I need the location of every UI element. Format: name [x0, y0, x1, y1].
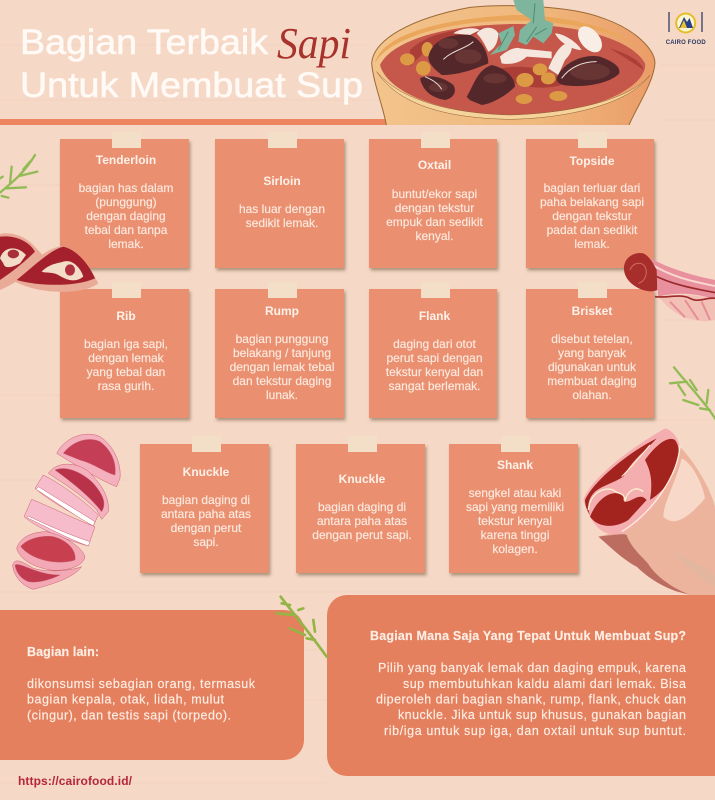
panel: Bagian lain	[0, 610, 304, 760]
title	[20, 23, 363, 105]
illustration: leg of beef right	[583, 428, 715, 595]
note: Flank: sangat berlemak.	[388, 379, 481, 393]
note: Tenderloin: (punggung)	[95, 195, 157, 209]
note: Knuckle 2: dengan perut sapi.	[312, 528, 412, 542]
note: Knuckle 1: Knuckle	[183, 465, 230, 479]
note: Brisket: Brisket	[572, 304, 612, 318]
note: Rump: bagian punggung	[236, 332, 328, 346]
note: Rib: yang tebal dan	[87, 365, 165, 379]
panel: Bagian mana saja: Bagian Mana Saja Yang Tepat Untuk Membuat Sup?	[370, 629, 686, 643]
panel: Bagian mana saja: Pilih yang banyak lemak dan daging empuk, karena	[378, 661, 686, 675]
note: Rib: rasa gurih.	[98, 379, 154, 393]
icon: herb sprig right	[670, 367, 715, 418]
note: Rib: bagian iga sapi,	[84, 337, 168, 351]
logo: Cairo Food	[666, 12, 706, 46]
note: Flank	[369, 282, 497, 418]
meat	[420, 35, 619, 105]
note: Tenderloin: lemak.	[108, 237, 144, 251]
illustration: bowl of soup	[372, 0, 655, 127]
note: Knuckle 2: bagian daging di	[318, 500, 406, 514]
note: Tenderloin: tebal dan tanpa	[85, 223, 168, 237]
title: Bagian Terbaik	[20, 23, 269, 62]
note: Brisket: disebut tetelan,	[551, 332, 633, 346]
note: Knuckle 1: dengan perut	[171, 521, 242, 535]
note: Topside: Topside	[569, 154, 615, 168]
note: Brisket	[526, 282, 654, 418]
note: Brisket: yang banyak	[558, 346, 627, 360]
note: Flank: tekstur kenyal dan	[386, 365, 483, 379]
note: Rib: dengan lemak	[88, 351, 165, 365]
illustration: ribs right	[624, 253, 715, 322]
panel: Bagian mana saja: knuckle. Jika untuk sup khusus, gunakan bagian	[398, 708, 686, 722]
herb	[490, 0, 553, 55]
note: Rump: belakang / tanjung	[233, 346, 331, 360]
note: Oxtail: Oxtail	[418, 158, 451, 172]
note: Brisket: digunakan untuk	[548, 360, 637, 374]
panel: Bagian mana saja: diperoleh dari bagian shank, rump, flank, chuck dan	[376, 692, 686, 706]
note: Shank: kolagen.	[492, 542, 538, 556]
mushrooms	[453, 28, 582, 75]
note: Knuckle 1: antara paha atas	[161, 507, 251, 521]
note: Topside: paha belakang sapi	[540, 195, 644, 209]
note: Rump: dengan lemak tebal	[230, 360, 334, 374]
title: Untuk Membuat Sup	[20, 66, 363, 105]
panel: Bagian mana saja	[327, 595, 715, 776]
note: Shank: Shank	[497, 458, 533, 472]
note: Oxtail: dengan tekstur	[395, 201, 474, 215]
note: Shank: sengkel atau kaki	[469, 486, 561, 500]
note: Rump: dan tekstur daging	[233, 374, 331, 388]
note: Shank: tekstur kenyal	[478, 514, 552, 528]
note: Shank: sapi yang memiliki	[466, 500, 564, 514]
note: Rump	[215, 282, 344, 418]
panel: Bagian lain: dikonsumsi sebagian orang, termasuk	[27, 677, 256, 691]
note: Topside: lemak.	[574, 237, 610, 251]
source link: https://cairofood.id/	[18, 774, 133, 788]
illustration: sliced meat left	[13, 434, 120, 589]
illustration: steak slices left	[0, 233, 98, 292]
note: Knuckle 2: Knuckle	[339, 472, 386, 486]
note: Tenderloin	[60, 132, 189, 268]
note: Shank	[449, 436, 578, 573]
note: Oxtail: kenyal.	[415, 229, 454, 243]
note: Shank: karena tinggi	[481, 528, 549, 542]
note: Topside: dengan tekstur	[552, 209, 632, 223]
note: Sirloin: sedikit lemak.	[246, 216, 318, 230]
note: Topside: padat dan sedikit	[547, 223, 638, 237]
note: Rump: Rump	[265, 304, 299, 318]
note: Brisket: membuat daging	[547, 374, 637, 388]
note: Rib	[60, 282, 189, 418]
note: Knuckle 1	[140, 436, 269, 573]
panel: Bagian mana saja: rib/iga untuk sup iga, dan oxtail untuk sup buntut.	[384, 724, 686, 738]
note: Flank: Flank	[419, 309, 450, 323]
note: Sirloin: has luar dengan	[239, 202, 325, 216]
note: Tenderloin: Tenderloin	[96, 153, 156, 167]
note: Rib: Rib	[116, 309, 136, 323]
note: Sirloin	[215, 132, 344, 268]
note: Topside	[526, 132, 654, 268]
note: Oxtail: empuk dan sedikit	[386, 215, 484, 229]
note: Knuckle 1: bagian daging di	[162, 493, 250, 507]
note: Rump: lunak.	[266, 388, 298, 402]
title accent: Sapi: Sapi	[277, 19, 351, 68]
note: Sirloin: Sirloin	[263, 174, 301, 188]
title underline	[0, 119, 386, 125]
note: Oxtail: buntut/ekor sapi	[392, 187, 477, 201]
note: Tenderloin: bagian has dalam	[79, 181, 173, 195]
logo: Cairo Food: CAIRO FOOD	[666, 40, 706, 46]
panel: Bagian lain: Bagian lain:	[27, 645, 99, 659]
note: Flank: daging dari otot	[393, 337, 477, 351]
note: Brisket: olahan.	[572, 388, 612, 402]
note: Knuckle 1: sapi.	[193, 535, 219, 549]
panel: Bagian lain: bagian kepala, otak, lidah, mulut	[27, 692, 225, 706]
note: Knuckle 2: antara paha atas	[317, 514, 407, 528]
panel: Bagian lain: (cingur), dan testis sapi (torpedo).	[27, 708, 231, 722]
corn	[400, 42, 567, 104]
note: Knuckle 2	[296, 436, 425, 573]
icon: herb sprig left	[0, 155, 37, 198]
note: Tenderloin: dengan daging	[86, 209, 166, 223]
panel: Bagian mana saja: sup membutuhkan kaldu alami dari lemak. Bisa	[403, 677, 686, 691]
note: Oxtail	[369, 132, 497, 268]
note: Flank: perut sapi dengan	[386, 351, 483, 365]
note: Topside: bagian terluar dari	[544, 181, 640, 195]
icon: herb sprig bottom	[277, 597, 327, 657]
